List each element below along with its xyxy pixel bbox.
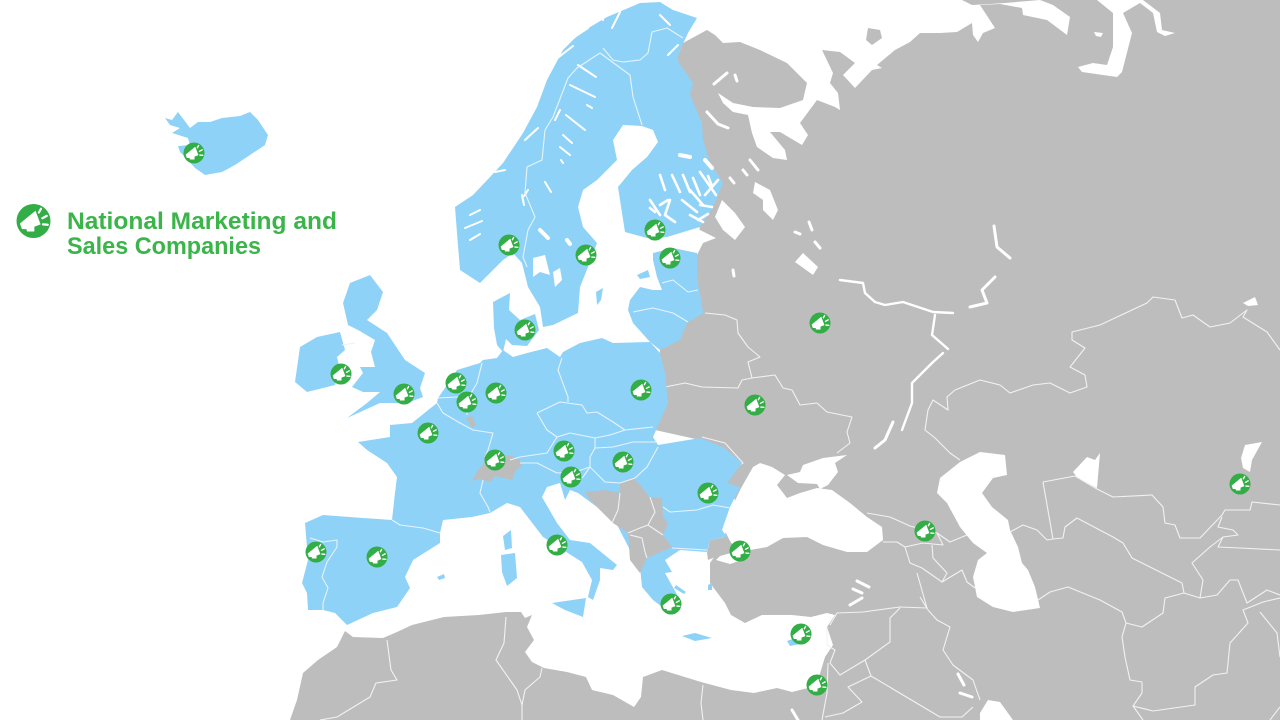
Denmark [493, 293, 539, 352]
legend: National Marketing and Sales Companies [16, 204, 337, 260]
marker: Cyprus [790, 624, 812, 644]
marker: Finland [644, 220, 666, 240]
Ireland [295, 332, 345, 392]
marker: Norway [498, 234, 520, 256]
marker: Switzerland [484, 450, 506, 470]
marker: Kazakhstan [1230, 474, 1250, 494]
marker: Russia [810, 312, 830, 334]
marker: Iceland [184, 142, 204, 164]
marker: Turkey [730, 540, 750, 562]
seas and lakes [665, 0, 1262, 720]
marker: Georgia [914, 520, 936, 542]
marker: Hungary [612, 452, 634, 472]
continental member countries [302, 338, 800, 646]
Iceland [165, 112, 268, 175]
legend text: National Marketing and [67, 208, 337, 235]
marker: Italy [546, 534, 568, 556]
marker: Austria [554, 440, 574, 462]
legend icon: megaphone [16, 204, 50, 238]
United Kingdom [343, 275, 425, 418]
member country borders [310, 343, 730, 610]
grey country borders [320, 297, 1280, 720]
marker: Denmark [514, 320, 536, 340]
marker: Netherlands [446, 372, 466, 394]
member countries: Nordics [455, 2, 723, 327]
marker: Greece [660, 594, 682, 614]
marker: Germany [486, 382, 506, 404]
marker: Poland [630, 380, 652, 400]
Baltic states [628, 248, 705, 350]
marker: Portugal [306, 542, 326, 562]
marker: Romania [698, 482, 718, 504]
marker: Ukraine [744, 394, 766, 416]
marker: Slovenia [560, 466, 582, 488]
marker: Ireland [330, 364, 352, 384]
marker: Israel [806, 674, 828, 696]
non-member enclaves: Switzerland, Luxembourg, Balkans [466, 416, 672, 573]
legend: National Marketing and Sales Companies: Sales Companies [67, 233, 261, 260]
marker: United Kingdom [394, 384, 414, 404]
marker: Belgium [456, 392, 478, 412]
marker: France [418, 422, 438, 444]
non-member land: Russia, Caucasus, Turkey, Middle East, Central Asia [655, 0, 1280, 720]
marker: Spain [366, 546, 388, 568]
marker: Sweden [576, 244, 596, 266]
Turkish Thrace [707, 537, 735, 560]
North Africa [290, 612, 822, 720]
marker: Baltics [660, 248, 680, 268]
